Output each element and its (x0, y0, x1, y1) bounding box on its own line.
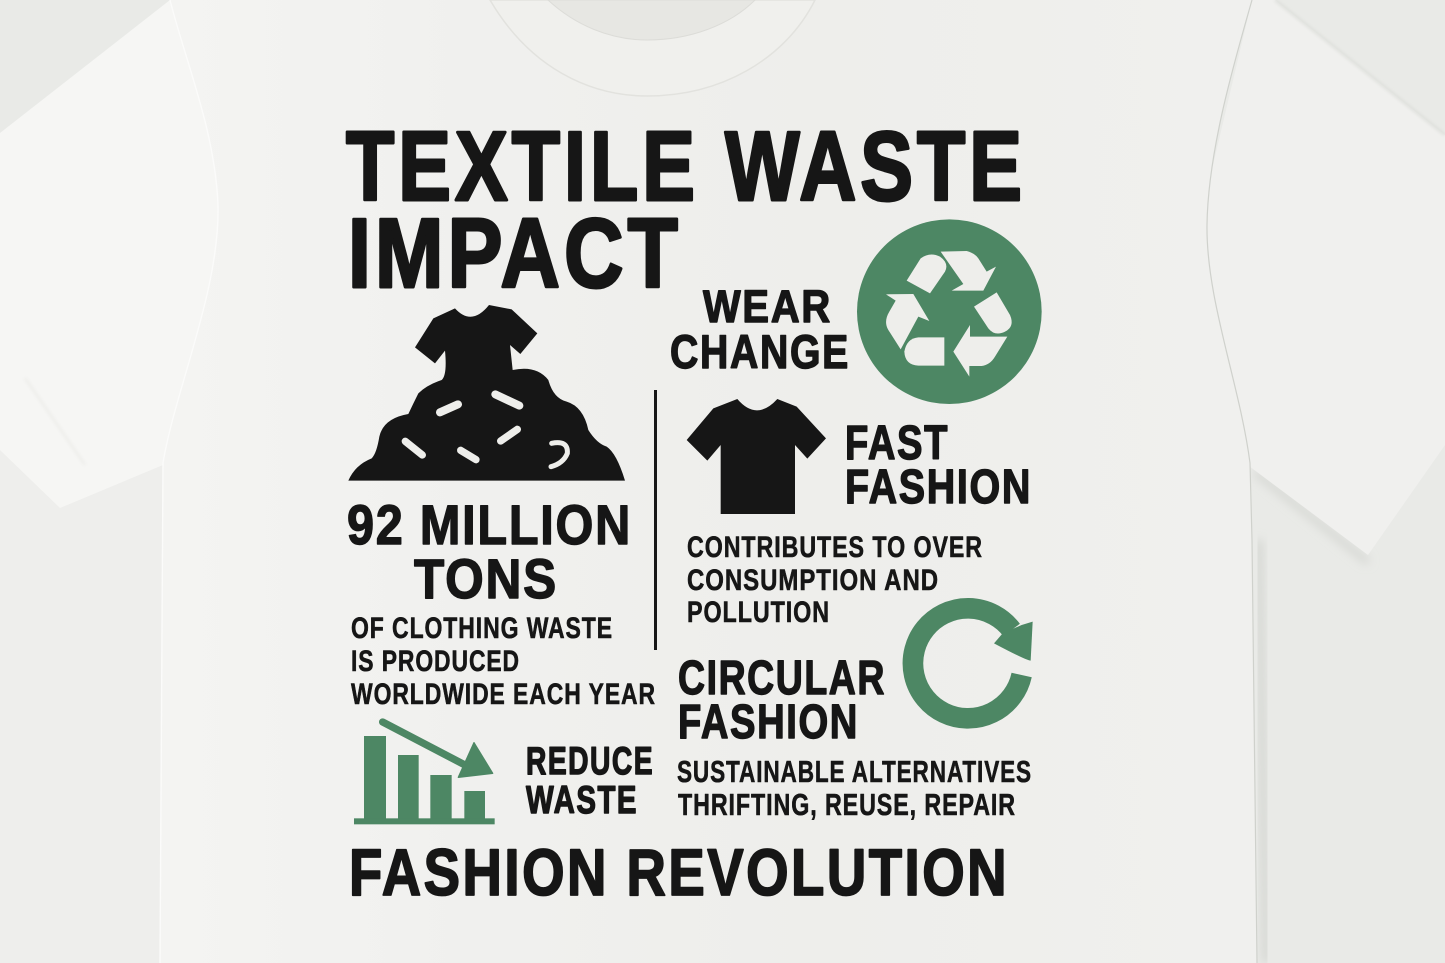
statistic: 92 million tons: TONS (414, 547, 558, 610)
fast fashion description: POLLUTION (687, 596, 830, 629)
title (346, 111, 1026, 308)
statistic: 92 million tons: 92 MILLION (347, 493, 632, 556)
wear change label (670, 281, 850, 378)
fast fashion heading (845, 417, 1032, 514)
fast fashion heading: FASHION (845, 461, 1032, 514)
circular fashion description: THRIFTING, REUSE, REPAIR (678, 787, 1016, 822)
fast fashion description: CONTRIBUTES TO OVER (687, 531, 983, 564)
fast fashion description (687, 531, 983, 629)
statistic description (351, 612, 656, 711)
statistic description: WORLDWIDE EACH YEAR (351, 678, 656, 711)
fast fashion description: CONSUMPTION AND (687, 564, 939, 597)
circular fashion description: SUSTAINABLE ALTERNATIVES (677, 754, 1032, 789)
circular fashion heading: CIRCULAR (678, 652, 886, 705)
circular fashion heading (678, 652, 886, 749)
circular fashion heading: FASHION (678, 696, 859, 749)
wear change label: CHANGE (670, 325, 850, 378)
statistic: 92 million tons (347, 493, 632, 610)
circular fashion description (677, 754, 1032, 822)
icon: t-shirt (687, 399, 826, 514)
icon: circular arrow (913, 608, 1033, 718)
wear change label: WEAR (703, 281, 832, 332)
title: TEXTILE WASTE (346, 111, 1026, 221)
reduce waste label: WASTE (526, 779, 638, 822)
icon: declining bar chart (354, 722, 495, 824)
statistic description: IS PRODUCED (351, 645, 520, 678)
footer slogan: FASHION REVOLUTION (349, 835, 1009, 909)
divider (654, 390, 657, 650)
reduce waste label (526, 740, 654, 822)
icon: clothing waste pile (348, 305, 625, 481)
title: IMPACT (348, 198, 682, 308)
fast fashion heading: FAST (845, 417, 949, 470)
reduce waste label: REDUCE (526, 740, 654, 783)
icon: recycling symbol (857, 219, 1042, 404)
statistic description: OF CLOTHING WASTE (351, 612, 613, 645)
